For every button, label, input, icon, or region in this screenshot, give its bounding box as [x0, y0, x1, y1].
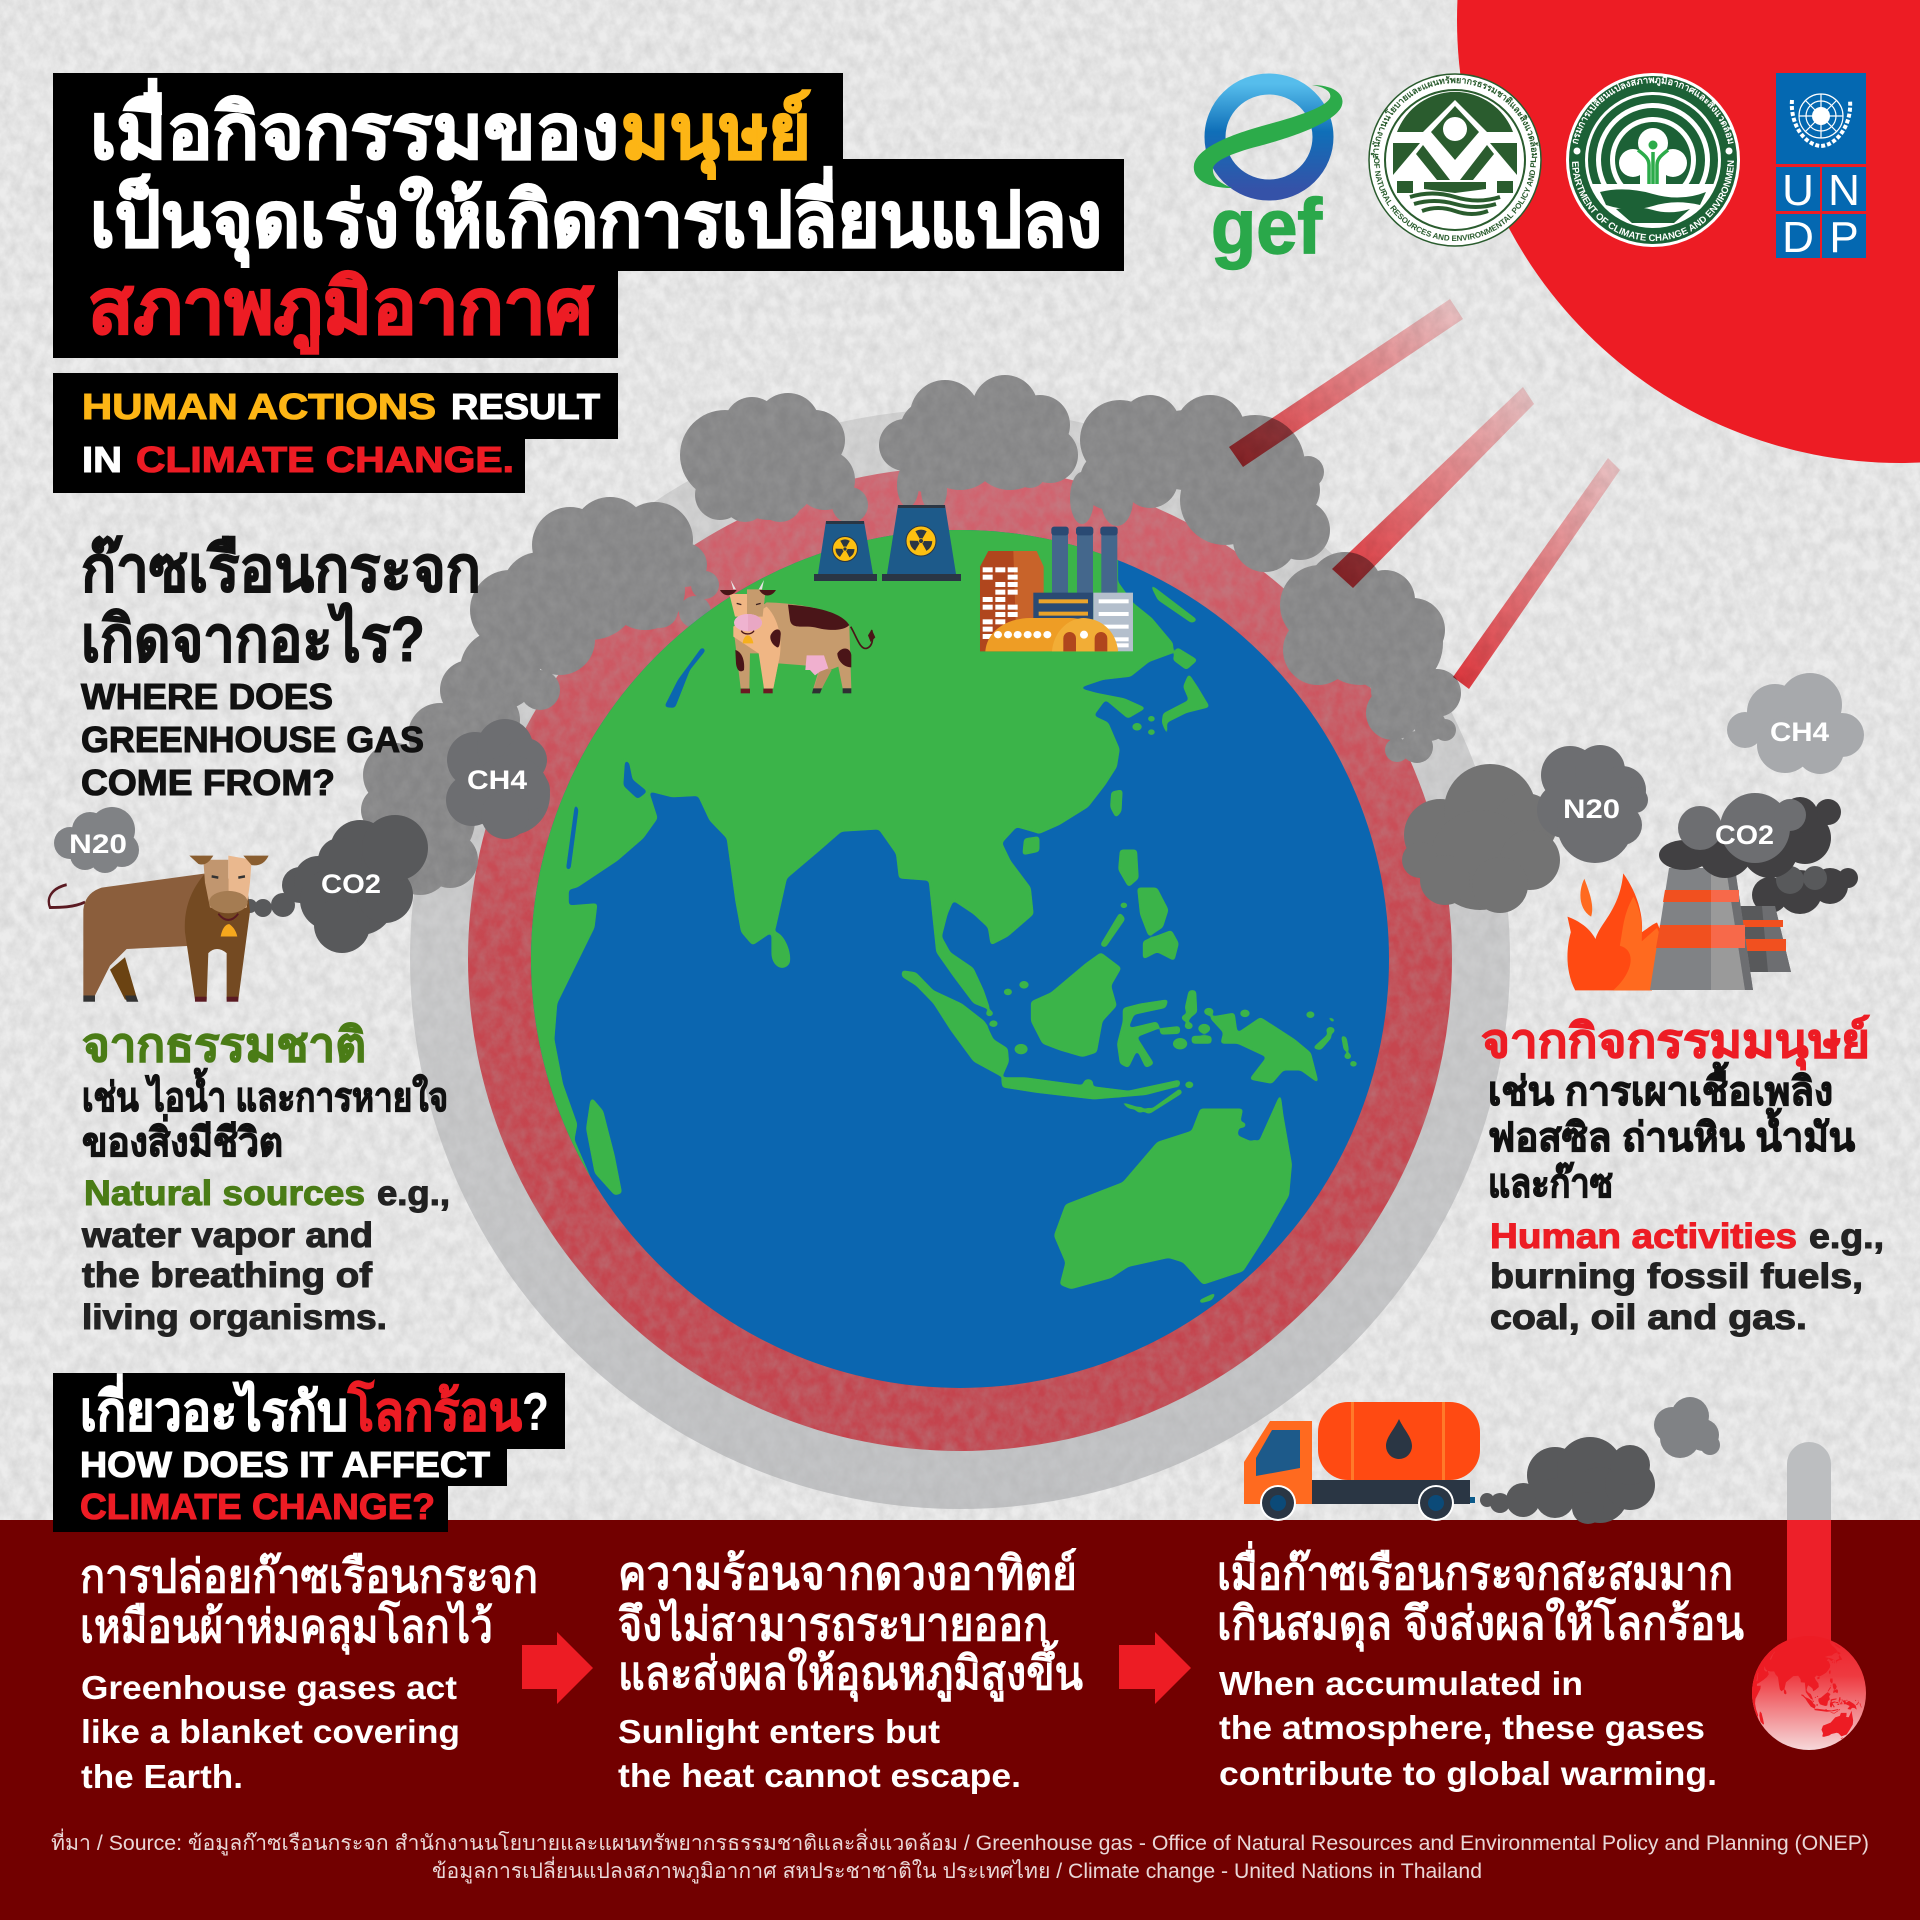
icon: thermometer with heated earth bulb [1741, 1442, 1866, 1750]
text: natural sources: ของสิ่งมีชีวิต [82, 1114, 283, 1165]
logo: Office of Natural Resources and Environmental Policy and Planning seal: สำนักงานนโยบายและแผนทรัพยากรธรรมชาติและสิ่งแวดล้อม [1370, 76, 1538, 158]
icon: nuclear cooling towers [814, 505, 961, 581]
logo: GEF [1194, 84, 1343, 270]
text: natural sources: living organisms. [82, 1298, 387, 1337]
logo: GEF: gef [1211, 182, 1323, 270]
icon: CH4 cloud (natural) [446, 719, 550, 839]
heading: where does greenhouse gas come from: ก๊าซเรือนกระจก [81, 533, 481, 605]
heading: where does greenhouse gas come from [81, 533, 481, 803]
emission smoke clouds around the globe [361, 375, 1461, 895]
heading: how does it affect climate change [53, 1373, 565, 1532]
red atmosphere ring [468, 467, 1452, 1451]
text: step 3 global warming: When accumulated in [1219, 1665, 1583, 1702]
icon: CO2 cloud (natural): CO2 [321, 869, 381, 899]
text: step 1 blanket: Greenhouse gases act [81, 1669, 457, 1706]
heading: how does it affect climate change: CLIMATE CHANGE? [80, 1486, 435, 1527]
logo: UNDP [1776, 73, 1866, 262]
source footer: ข้อมูลการเปลี่ยนแปลงสภาพภูมิอากาศ สหประชาชาติใน ประเทศไทย / Climate change - United Nations in Thailand [432, 1856, 1482, 1884]
icon: CO2 cloud (natural) [243, 815, 428, 953]
text: step 3 global warming: เกินสมดุล จึงส่งผลให้โลกร้อน [1217, 1596, 1744, 1652]
logo: UNDP: D [1782, 213, 1814, 262]
title: Thai headline on stepped black boxes: เป็นจุดเร่งให้เกิดการเปลี่ยนแปลง [90, 166, 1102, 268]
icon: human-activity gas clouds: CH4 [1770, 717, 1829, 747]
text: human activities: Human activities [1490, 1217, 1797, 1256]
icon: CH4 cloud (natural): CH4 [467, 765, 527, 795]
text: step 2 heat trapped [618, 1547, 1084, 1794]
text: step 1 blanket: like a blanket covering [81, 1713, 460, 1750]
text: step 1 blanket: การปล่อยก๊าซเรือนกระจก [80, 1550, 538, 1602]
text: human activities: coal, oil and gas. [1490, 1298, 1807, 1337]
text: step 1 blanket [80, 1550, 538, 1795]
text: natural sources: the breathing of [82, 1256, 372, 1295]
logo: Office of Natural Resources and Environmental Policy and Planning seal [1368, 73, 1542, 247]
logo: UNDP: N [1828, 166, 1860, 215]
heading: where does greenhouse gas come from: WHERE DOES [81, 676, 333, 717]
text: step 3 global warming: the atmosphere, these gases [1219, 1709, 1705, 1746]
text: human activities: และก๊าซ [1488, 1162, 1613, 1206]
heading: how does it affect climate change: โลกร้อน [347, 1380, 522, 1442]
text: step 1 blanket: เหมือนผ้าห่มคลุมโลกไว้ [80, 1599, 493, 1655]
heading: how does it affect climate change: HOW DOES IT AFFECT [80, 1444, 490, 1485]
heading: where does greenhouse gas come from: COME FROM? [81, 762, 335, 803]
icon: smokestacks [1650, 793, 1858, 990]
logo: UNDP: P [1829, 213, 1859, 262]
subtitle: Human actions result in climate change: HUMAN ACTIONS [82, 386, 436, 427]
subtitle: Human actions result in climate change [53, 373, 618, 493]
icon: oil tanker truck [1244, 1402, 1480, 1521]
text: step 2 heat trapped: ความร้อนจากดวงอาทิตย์ [618, 1547, 1077, 1599]
icon: N2O cloud (natural) [54, 807, 139, 873]
icon: flames [1567, 873, 1664, 990]
logo: Department of Climate Change and Environment seal: กรมการเปลี่ยนแปลงสภาพภูมิอากาศและสิ่งแวดล้อม [1572, 76, 1734, 144]
text: natural sources [81, 1018, 450, 1337]
heading: where does greenhouse gas come from: GREENHOUSE GAS [81, 719, 424, 760]
text: step 2 heat trapped: Sunlight enters but [618, 1713, 940, 1750]
icon: human-activity gas clouds: N20 [1563, 794, 1620, 824]
subtitle: Human actions result in climate change: IN [82, 439, 122, 480]
text: natural sources: จากธรรมชาติ [82, 1018, 366, 1071]
text: human activities: burning fossil fuels, [1490, 1257, 1863, 1296]
text: natural sources: e.g., [377, 1174, 450, 1213]
text: step 2 heat trapped: จึงไม่สามารถระบายออก [618, 1598, 1048, 1650]
title: Thai headline on stepped black boxes: มนุษย์ [621, 90, 811, 180]
icon: factory [980, 527, 1133, 651]
text: step 2 heat trapped: และส่งผลให้อุณหภูมิสูงขึ้น [618, 1639, 1084, 1702]
text: human activities: จากกิจกรรมมนุษย์ [1481, 1014, 1870, 1070]
globe [531, 530, 1389, 1388]
text: step 3 global warming [1217, 1541, 1744, 1792]
title: Thai headline on stepped black boxes: เมื่อกิจกรรมของ [90, 78, 619, 175]
text: human activities: ฟอสซิล ถ่านหิน น้ำมัน [1488, 1108, 1855, 1160]
text: natural sources: water vapor and [81, 1216, 373, 1255]
logo: Department of Climate Change and Environment seal [1566, 73, 1740, 247]
logo: UNDP: U [1782, 166, 1814, 215]
text: step 3 global warming: contribute to global warming. [1219, 1755, 1717, 1792]
text: natural sources: เช่น ไอน้ำ และการหายใจ [82, 1068, 448, 1120]
text: step 2 heat trapped: the heat cannot escape. [618, 1757, 1021, 1794]
heading: how does it affect climate change: ? [522, 1382, 549, 1442]
text: natural sources: Natural sources [84, 1174, 365, 1213]
outer gray atmosphere ring [410, 409, 1510, 1509]
arrow: step 2 to step 3 [1119, 1632, 1191, 1704]
text: step 3 global warming: เมื่อก๊าซเรือนกระจกสะสมมาก [1217, 1541, 1733, 1599]
icon: N2O cloud (natural): N20 [69, 829, 127, 859]
bottom dark red band [0, 1520, 1920, 1920]
logo: Office of Natural Resources and Environmental Policy and Planning seal: OFFICE OF NATURAL RESOURCES AND ENVIRONMENTAL POLICY AND PLANNING [1374, 158, 1536, 241]
text: human activities: เช่น การเผาเชื้อเพลิง [1488, 1062, 1833, 1114]
icon: dairy cow on the globe [720, 580, 875, 693]
text: human activities: e.g., [1809, 1217, 1884, 1256]
text: human activities [1481, 1014, 1884, 1337]
icon: smokestacks: CO2 [1715, 820, 1774, 850]
title: Thai headline on stepped black boxes: สภาพภูมิอากาศ [88, 265, 595, 354]
icon: brown cow breathing [49, 856, 269, 1002]
subtitle: Human actions result in climate change: CLIMATE CHANGE. [136, 439, 514, 480]
red sun disc [1457, 0, 1920, 463]
heading: where does greenhouse gas come from: เกิดจากอะไร? [81, 602, 425, 675]
icon: human-activity gas clouds [1402, 673, 1864, 913]
source footer: ที่มา / Source: ข้อมูลก๊าซเรือนกระจก สำนักงานนโยบายและแผนทรัพยากรธรรมชาติและสิ่งแวดล้อม / Greenhouse gas - Office of Natural Resources and Environmental Policy and Planning (ONEP) [51, 1828, 1869, 1856]
heading: how does it affect climate change: เกี่ยวอะไรกับ [80, 1373, 348, 1442]
source footer [51, 1828, 1869, 1884]
icon: truck exhaust smoke [1480, 1397, 1720, 1524]
text: step 1 blanket: the Earth. [81, 1758, 243, 1795]
paper grain texture [0, 0, 1920, 1520]
title: Thai headline on stepped black boxes [53, 73, 1124, 358]
subtitle: Human actions result in climate change: RESULT [451, 386, 600, 427]
arrow: step 1 to step 2 [522, 1632, 593, 1704]
sun rays passing through the atmosphere [1229, 299, 1620, 689]
